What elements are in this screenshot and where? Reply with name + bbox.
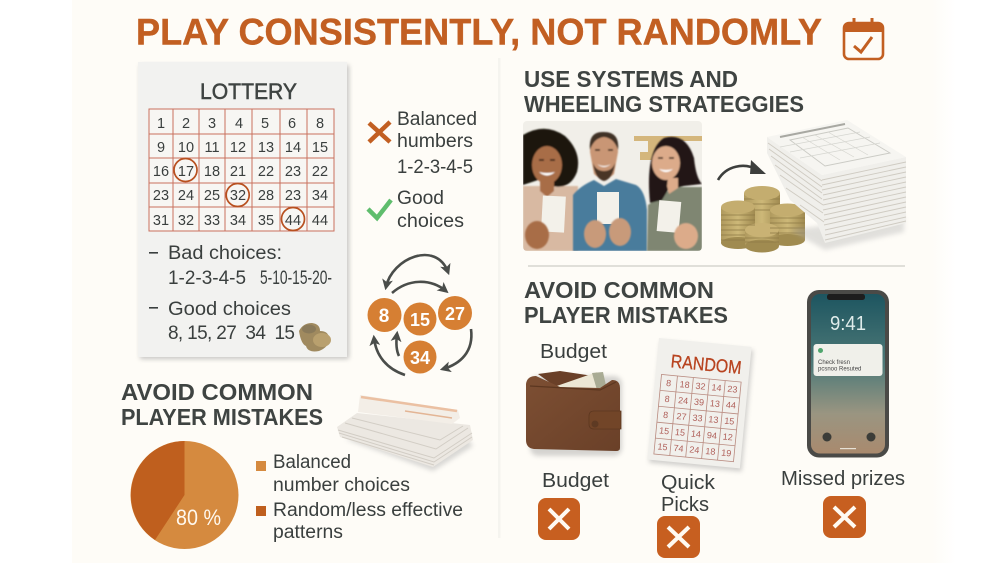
ticket grid: 12 (722, 432, 733, 443)
number grid: 15 (312, 140, 328, 156)
ticket heading: LOTTERY (200, 79, 297, 104)
number balls with cycle arrows: 8 (379, 306, 389, 327)
number grid: 28 (258, 188, 274, 204)
number grid: 23 (285, 188, 301, 204)
number grid: 33 (204, 213, 220, 229)
number grid: 8 (316, 116, 324, 132)
label: quick picks with cross (657, 472, 716, 558)
number grid: 23 (153, 188, 169, 204)
pie legend: Balanced (273, 452, 351, 473)
number balls with cycle arrows: 27 (445, 304, 465, 324)
bad choices text: Bad choices: (168, 243, 282, 264)
label: missed prizes with cross (781, 468, 905, 538)
ticket grid: 18 (679, 379, 690, 390)
pie legend: number choices (273, 475, 410, 496)
good choices text: 8, 15, 27 34 15 (168, 323, 295, 344)
image: wallet (526, 371, 622, 456)
ticket grid: 15 (724, 416, 735, 427)
number grid: 11 (204, 140, 220, 156)
number grid: 1 (157, 116, 165, 132)
pie legend (256, 452, 463, 543)
ticket grid: 15 (657, 441, 668, 452)
pie legend: Random/less effective (273, 500, 463, 521)
icon: green check (368, 200, 391, 218)
ticket grid: 18 (705, 446, 716, 457)
pie chart: 80 % (176, 505, 221, 530)
ticket grid: 15 (675, 427, 686, 438)
ticket grid: 94 (706, 430, 717, 441)
number grid: 23 (285, 164, 301, 180)
ticket grid: 27 (676, 411, 687, 422)
person: left woman (523, 129, 578, 251)
icon: calendar with check (844, 18, 883, 59)
number grid: 31 (153, 213, 169, 229)
heading: avoid common player mistakes (left) (121, 379, 323, 430)
number grid: 3 (208, 116, 216, 132)
number grid: 22 (312, 164, 328, 180)
number grid: 34 (230, 213, 246, 229)
heading: use systems and wheeling strategies (524, 66, 804, 117)
ticket grid: 44 (725, 400, 736, 411)
number grid: 5 (261, 116, 269, 132)
balanced numbers text: humbers (397, 131, 473, 152)
divider (528, 265, 905, 267)
ticket grid: 13 (708, 414, 719, 425)
icon: red cross (369, 122, 390, 142)
good choices text: Good choices (168, 299, 291, 320)
image: random ticket (647, 338, 754, 472)
number grid: 2 (182, 116, 190, 132)
heading: avoid common player mistakes (left): PLAYER MISTAKES (121, 404, 323, 430)
ticket grid: 24 (689, 444, 700, 455)
label: budget: Budget (540, 341, 607, 363)
icon: small coins (299, 323, 331, 351)
ticket grid: 19 (721, 448, 732, 458)
number grid (149, 109, 334, 231)
number balls with cycle arrows: 34 (410, 348, 430, 368)
bad choices text: 5-10-15-20- (260, 268, 332, 289)
number grid: 32 (178, 213, 194, 229)
number grid: 24 (178, 188, 194, 204)
title: PLAY CONSISTENTLY, NOT RANDOMLY (136, 10, 822, 52)
image: ticket pile (337, 395, 473, 471)
label: quick picks with cross: Picks (661, 494, 709, 516)
label: budget with cross (538, 470, 609, 540)
panel: lottery ticket (138, 62, 349, 359)
ticket grid: 14 (691, 429, 701, 439)
number grid: 25 (204, 188, 220, 204)
image: phone with notification (807, 290, 889, 458)
ticket grid: 8 (666, 378, 672, 388)
balanced numbers text: Balanced (397, 109, 477, 130)
number grid: 12 (230, 140, 246, 156)
number grid: 35 (258, 213, 274, 229)
good choices side text: Good (397, 188, 444, 209)
number grid: 10 (178, 140, 194, 156)
number grid: 9 (157, 140, 165, 156)
ticket heading: RANDOM (670, 350, 743, 378)
label: missed prizes with cross: Missed prizes (781, 468, 905, 490)
ticket grid: 32 (695, 381, 706, 392)
bad choices text (149, 243, 332, 289)
heading: use systems and wheeling strategies: WHEELING STRATEGGIES (524, 91, 804, 117)
number grid: 6 (288, 116, 296, 132)
notification (814, 344, 882, 376)
number grid: 44 (312, 213, 328, 229)
bad choices text: 1-2-3-4-5 (168, 268, 246, 289)
number balls with cycle arrows (368, 255, 472, 375)
ticket grid (654, 374, 741, 462)
balanced numbers text: 1-2-3-4-5 (397, 157, 473, 178)
heading: avoid common player mistakes (left): AVOID COMMON (121, 379, 313, 405)
ticket grid: 74 (673, 443, 684, 454)
arrow to stacks (718, 160, 766, 180)
notification: Check fresn (818, 360, 850, 366)
ticket grid: 15 (659, 425, 670, 436)
heading: use systems and wheeling strategies: USE SYSTEMS AND (524, 66, 738, 92)
number grid: 17 (178, 164, 194, 180)
good choices side text: choices (397, 211, 464, 232)
ticket grid: 23 (727, 384, 738, 395)
number grid: 14 (285, 140, 301, 156)
number balls with cycle arrows: 15 (410, 310, 430, 330)
label: budget with cross: Budget (542, 470, 609, 492)
number grid: 34 (312, 188, 328, 204)
image: coin stacks (721, 186, 805, 252)
tickets held (541, 192, 681, 233)
pie legend: patterns (273, 522, 343, 543)
label: quick picks with cross: Quick (661, 472, 716, 494)
heading: avoid common player mistakes (right): AVOID COMMON (524, 277, 714, 303)
good choices side text (397, 188, 464, 232)
ticket grid: 14 (711, 382, 722, 393)
number grid: 13 (258, 140, 274, 156)
heading: avoid common player mistakes (right) (524, 277, 728, 328)
pie chart (130, 441, 238, 549)
number grid: 16 (153, 164, 169, 180)
number grid: 4 (235, 116, 243, 132)
ticket grid: 8 (664, 394, 670, 404)
ticket grid: 8 (663, 410, 669, 420)
person: middle man (573, 132, 647, 251)
ticket grid: 39 (694, 397, 705, 408)
number grid: 21 (230, 164, 246, 180)
ticket grid: 13 (709, 398, 720, 409)
number grid: 18 (204, 164, 220, 180)
heading: avoid common player mistakes (right): PLAYER MISTAKES (524, 302, 728, 328)
clock: 9:41 (830, 313, 866, 335)
balanced numbers text (397, 109, 477, 178)
person: right woman (647, 137, 702, 251)
number grid: 44 (285, 213, 301, 229)
number grid: 32 (230, 188, 246, 204)
notification: pcsnoo Resuted (818, 366, 861, 372)
photo: three smiling people holding tickets (523, 121, 702, 251)
hands (525, 218, 698, 249)
image: stack of tickets (767, 120, 906, 250)
ticket grid: 24 (678, 395, 689, 406)
number grid: 22 (258, 164, 274, 180)
ticket grid: 33 (692, 413, 703, 424)
good choices text (149, 299, 295, 344)
